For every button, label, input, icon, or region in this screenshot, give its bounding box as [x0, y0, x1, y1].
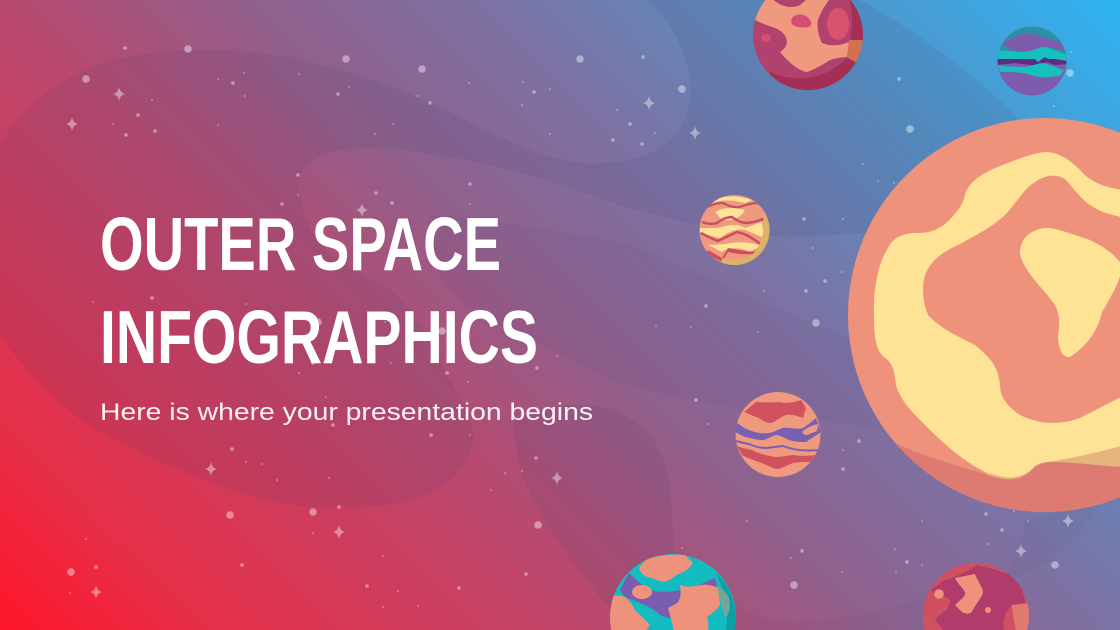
- planet: red and magenta, cropped at bottom: [920, 560, 1032, 630]
- subtitle: Here is where your presentation begins: [100, 399, 593, 426]
- planet: magenta top: [753, 0, 863, 90]
- planet: teal with continents, cropped at bottom: [608, 552, 738, 630]
- title: OUTER SPACE: [100, 202, 501, 286]
- sparkle stars: [66, 87, 1074, 599]
- title: [100, 202, 538, 379]
- title: INFOGRAPHICS: [100, 295, 538, 379]
- planet: large salmon and yellow: [848, 118, 1120, 520]
- planet: teal and purple: [996, 25, 1068, 98]
- planet: yellow banded: [700, 195, 770, 265]
- planet: red and purple banded: [734, 390, 822, 480]
